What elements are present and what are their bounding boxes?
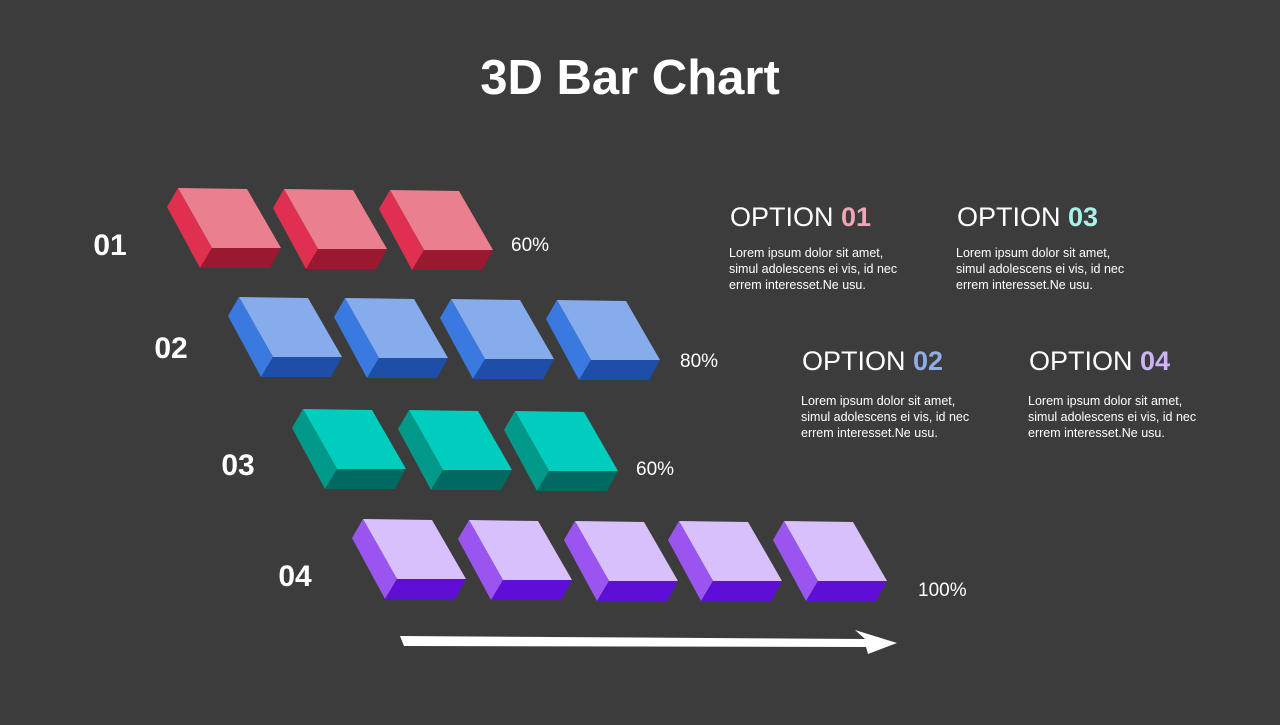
value 100%: 100% (918, 580, 967, 601)
row 02 (154, 297, 718, 380)
option 03 (956, 202, 1124, 292)
option 02 (801, 346, 969, 440)
option 04: errem interesset.Ne usu. (1028, 426, 1165, 440)
value 80%: 80% (680, 351, 718, 372)
label 02: 02 (154, 332, 188, 365)
label 04: 04 (278, 560, 312, 593)
option 04 (1028, 346, 1196, 440)
option 04: simul adolescens ei vis, id nec (1028, 410, 1196, 424)
option 01: errem interesset.Ne usu. (729, 278, 866, 292)
value 60%: 60% (511, 235, 549, 256)
option 02: Lorem ipsum dolor sit amet, (801, 394, 955, 408)
blocks row 01 (167, 188, 493, 270)
option 04: OPTION 04 (1029, 346, 1170, 376)
blocks row 03 (292, 409, 618, 491)
option 01: simul adolescens ei vis, id nec (729, 262, 897, 276)
option 02: OPTION 02 (802, 346, 943, 376)
option 03: simul adolescens ei vis, id nec (956, 262, 1124, 276)
blocks row 02 (228, 297, 660, 380)
label 01: 01 (93, 229, 127, 262)
option 03: errem interesset.Ne usu. (956, 278, 1093, 292)
arrow (400, 630, 897, 654)
label 03: 03 (221, 449, 255, 482)
row 04 (278, 519, 967, 601)
option 01 (729, 202, 897, 292)
option 01: Lorem ipsum dolor sit amet, (729, 246, 883, 260)
row 01 (93, 188, 549, 270)
title: 3D Bar Chart (480, 51, 780, 105)
option 01: OPTION 01 (730, 202, 871, 232)
row 03 (221, 409, 674, 491)
option 04: Lorem ipsum dolor sit amet, (1028, 394, 1182, 408)
option 02: simul adolescens ei vis, id nec (801, 410, 969, 424)
option 03: Lorem ipsum dolor sit amet, (956, 246, 1110, 260)
blocks row 04 (352, 519, 887, 601)
option 02: errem interesset.Ne usu. (801, 426, 938, 440)
option 03: OPTION 03 (957, 202, 1098, 232)
value 60%: 60% (636, 459, 674, 480)
